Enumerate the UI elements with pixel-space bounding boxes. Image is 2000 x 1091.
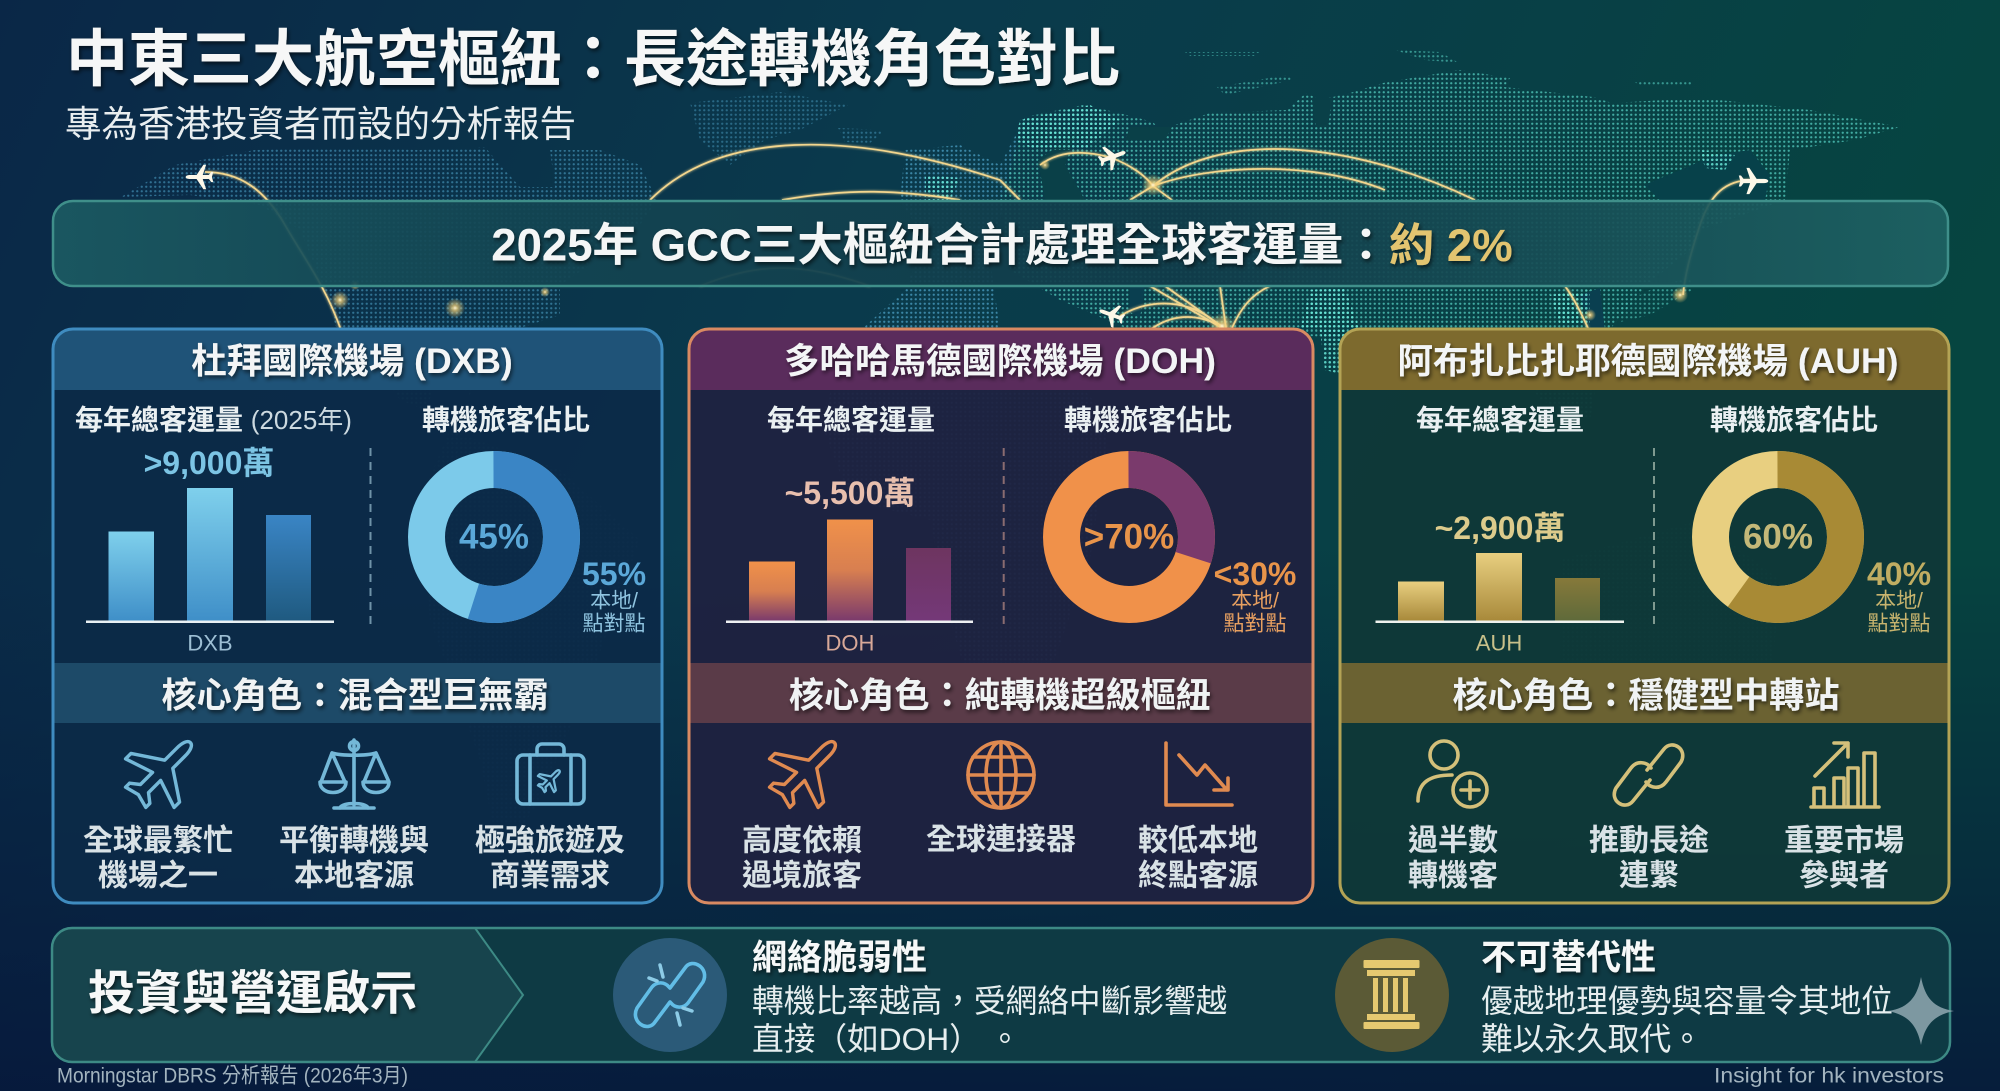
subtitle: 專為香港投資者而設的分析報告 <box>65 104 576 144</box>
panel: implications <box>52 928 1950 1062</box>
DOH local share <box>1214 556 1296 636</box>
irreplaceability text: 不可替代性 <box>1481 938 1656 978</box>
AUH donut chart <box>1710 470 1846 604</box>
DXB local share: 點對點 <box>582 612 646 636</box>
icon: balance scale <box>320 740 389 808</box>
DOH core role: 核心角色：純轉機超級樞紐 <box>789 676 1211 716</box>
DXB point 2: 平衡轉機與 <box>279 824 429 858</box>
DOH point 2: 全球連接器 <box>926 824 1076 856</box>
AUH local share: 點對點 <box>1868 612 1930 636</box>
AUH heading: 阿布扎比扎耶德國際機場 (AUH) <box>1398 341 1898 381</box>
AUH bar chart <box>1376 553 1624 656</box>
AUH bar chart: AUH <box>1476 630 1522 656</box>
irreplaceability text <box>1481 938 1893 1057</box>
DOH transfer label: 轉機旅客佔比 <box>1064 404 1232 436</box>
panel: DXB <box>53 329 662 903</box>
DXB point 3: 極強旅遊及 <box>475 824 625 858</box>
AUH local share <box>1867 556 1931 636</box>
panel: AUH <box>1340 329 1949 903</box>
DOH local share: 點對點 <box>1224 612 1286 636</box>
icon: plane <box>111 718 215 822</box>
fragility text <box>752 938 1227 1057</box>
AUH donut chart: 60% <box>1743 518 1813 556</box>
irreplaceability text: 優越地理優勢與容量令其地位 <box>1481 983 1893 1019</box>
DOH bar chart: DOH <box>826 630 874 656</box>
DXB core role: 核心角色：混合型巨無霸 <box>161 676 549 716</box>
DXB traffic label: 每年總客運量 (2025年) <box>75 404 352 436</box>
DOH traffic value: ~5,500萬 <box>785 475 915 511</box>
DXB local share <box>582 556 646 636</box>
DOH local share: <30% <box>1214 556 1296 592</box>
DXB point 1 <box>83 824 233 892</box>
AUH local share: 40% <box>1867 556 1931 592</box>
icon: sparkle <box>1888 977 1954 1045</box>
DXB point 2 <box>279 824 429 892</box>
icon: broken chain <box>613 938 727 1052</box>
irreplaceability text: 難以永久取代。 <box>1481 1021 1703 1057</box>
title: 中東三大航空樞紐：長途轉機角色對比 <box>66 26 1120 94</box>
AUH core role: 核心角色：穩健型中轉站 <box>1452 676 1840 716</box>
DOH point 1: 過境旅客 <box>742 860 862 892</box>
DOH donut chart <box>1062 470 1196 604</box>
DOH point 1: 高度依賴 <box>742 824 862 858</box>
icon: pillar <box>1335 938 1449 1052</box>
audience note: Insight for hk investors <box>1714 1064 1944 1088</box>
fragility text: 轉機比率越高，受網絡中斷影響越 <box>752 983 1227 1019</box>
DOH traffic label: 每年總客運量 <box>767 404 935 436</box>
DXB point 3 <box>475 824 625 892</box>
DXB bar chart <box>86 488 334 656</box>
AUH point 1 <box>1408 824 1498 892</box>
icon: declining chart <box>1166 743 1232 805</box>
DOH bar chart <box>726 520 973 656</box>
AUH point 2 <box>1589 824 1709 892</box>
DOH heading: 多哈哈馬德國際機場 (DOH) <box>784 341 1216 381</box>
headline banner: 2025年 GCC三大樞紐合計處理全球客運量：約 2% <box>491 220 1513 270</box>
DOH local share: 本地/ <box>1231 590 1279 612</box>
DXB donut chart: 45% <box>459 518 529 556</box>
headline banner <box>53 201 1948 286</box>
DXB traffic value: >9,000萬 <box>144 445 274 481</box>
icon: person plus <box>1418 741 1487 807</box>
AUH point 1: 轉機客 <box>1408 860 1498 892</box>
AUH point 3: 重要市場 <box>1784 824 1904 858</box>
AUH transfer label: 轉機旅客佔比 <box>1710 404 1878 436</box>
DOH donut chart: >70% <box>1084 518 1174 556</box>
panel: DOH <box>689 329 1313 903</box>
DXB transfer label: 轉機旅客佔比 <box>422 404 590 436</box>
DXB bar chart: DXB <box>187 630 233 656</box>
fragility text: 直接（如DOH） 。 <box>752 1021 1021 1057</box>
DXB point 3: 商業需求 <box>490 860 610 892</box>
DOH point 3 <box>1138 824 1258 892</box>
dotted world map <box>121 50 1900 860</box>
source note: Morningstar DBRS 分析報告 (2026年3月) <box>57 1064 408 1088</box>
DXB heading: 杜拜國際機場 (DXB) <box>191 341 513 381</box>
icon: rising bars <box>1811 743 1879 807</box>
AUH point 2: 推動長途 <box>1589 824 1709 858</box>
AUH local share: 本地/ <box>1875 590 1923 612</box>
DOH point 1 <box>742 824 862 892</box>
AUH point 3 <box>1784 824 1904 892</box>
icon: globe <box>968 742 1034 808</box>
implications heading: 投資與營運啟示 <box>88 966 417 1020</box>
AUH point 3: 參與者 <box>1799 860 1889 892</box>
DXB local share: 本地/ <box>590 590 638 612</box>
DXB local share: 55% <box>582 556 646 592</box>
DXB donut chart <box>426 470 562 604</box>
icon: chain link <box>1614 745 1683 805</box>
DOH point 3: 終點客源 <box>1138 860 1258 892</box>
DOH point 3: 較低本地 <box>1138 824 1258 858</box>
AUH point 2: 連繫 <box>1619 860 1679 892</box>
DXB point 2: 本地客源 <box>294 860 414 892</box>
DXB point 1: 機場之一 <box>98 860 218 892</box>
flight routes and planes <box>186 141 1768 339</box>
icon: suitcase <box>517 744 584 804</box>
DXB point 1: 全球最繁忙 <box>83 824 233 858</box>
AUH traffic value: ~2,900萬 <box>1435 510 1565 546</box>
icon: plane <box>755 718 859 822</box>
AUH point 1: 過半數 <box>1408 824 1498 858</box>
fragility text: 網絡脆弱性 <box>752 938 927 978</box>
AUH traffic label: 每年總客運量 <box>1416 404 1584 436</box>
